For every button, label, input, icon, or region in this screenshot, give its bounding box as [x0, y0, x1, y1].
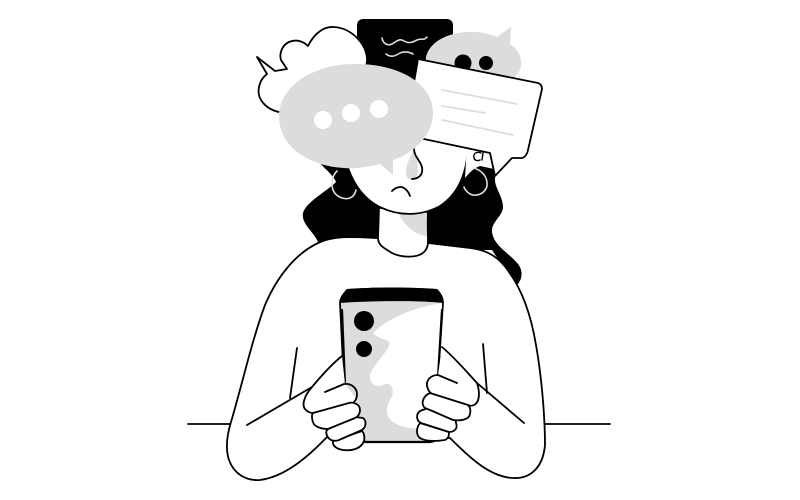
earring left — [332, 171, 356, 199]
phone top band — [340, 288, 443, 303]
ear — [465, 145, 494, 178]
body: sweater — [227, 237, 545, 480]
neck — [378, 208, 428, 257]
frown mouth — [392, 187, 410, 196]
dot — [342, 104, 360, 122]
table line right — [545, 423, 610, 425]
black message card — [357, 19, 453, 99]
neck shadow — [398, 213, 427, 236]
finger bottom — [417, 423, 449, 441]
nose line — [412, 149, 422, 179]
ear detail — [474, 152, 483, 161]
finger bottom — [333, 431, 364, 450]
cloud speech bubble — [257, 27, 367, 113]
left hand — [247, 356, 366, 450]
sleeve crease right — [483, 344, 487, 393]
finger third — [326, 417, 366, 441]
face — [340, 110, 468, 214]
dot — [370, 100, 388, 118]
sleeve crease left — [290, 348, 297, 398]
large grey speech bubble — [279, 64, 433, 175]
phone side edge — [342, 310, 442, 442]
dot — [314, 111, 332, 129]
dot — [454, 54, 472, 72]
palm — [304, 387, 313, 413]
camera large — [354, 311, 374, 331]
forearm — [442, 347, 524, 423]
white message card — [405, 59, 542, 176]
dot — [479, 56, 493, 70]
earring right — [464, 168, 487, 195]
phone — [340, 288, 443, 442]
forearm and palm — [303, 356, 357, 437]
nose shadow — [406, 146, 418, 180]
thumb — [427, 375, 457, 393]
palm fill — [427, 347, 478, 406]
hair — [303, 150, 522, 286]
card text lines — [442, 90, 517, 135]
table line left — [188, 423, 231, 425]
thumb — [325, 384, 357, 402]
camera small — [356, 341, 372, 357]
finger second — [423, 393, 470, 420]
finger third — [417, 408, 457, 432]
finger second — [312, 403, 360, 429]
squiggle text lines — [382, 37, 427, 56]
right hand — [417, 347, 524, 441]
phone highlight — [370, 303, 442, 429]
grey speech bubble right — [426, 27, 521, 85]
palm edge — [468, 383, 479, 406]
